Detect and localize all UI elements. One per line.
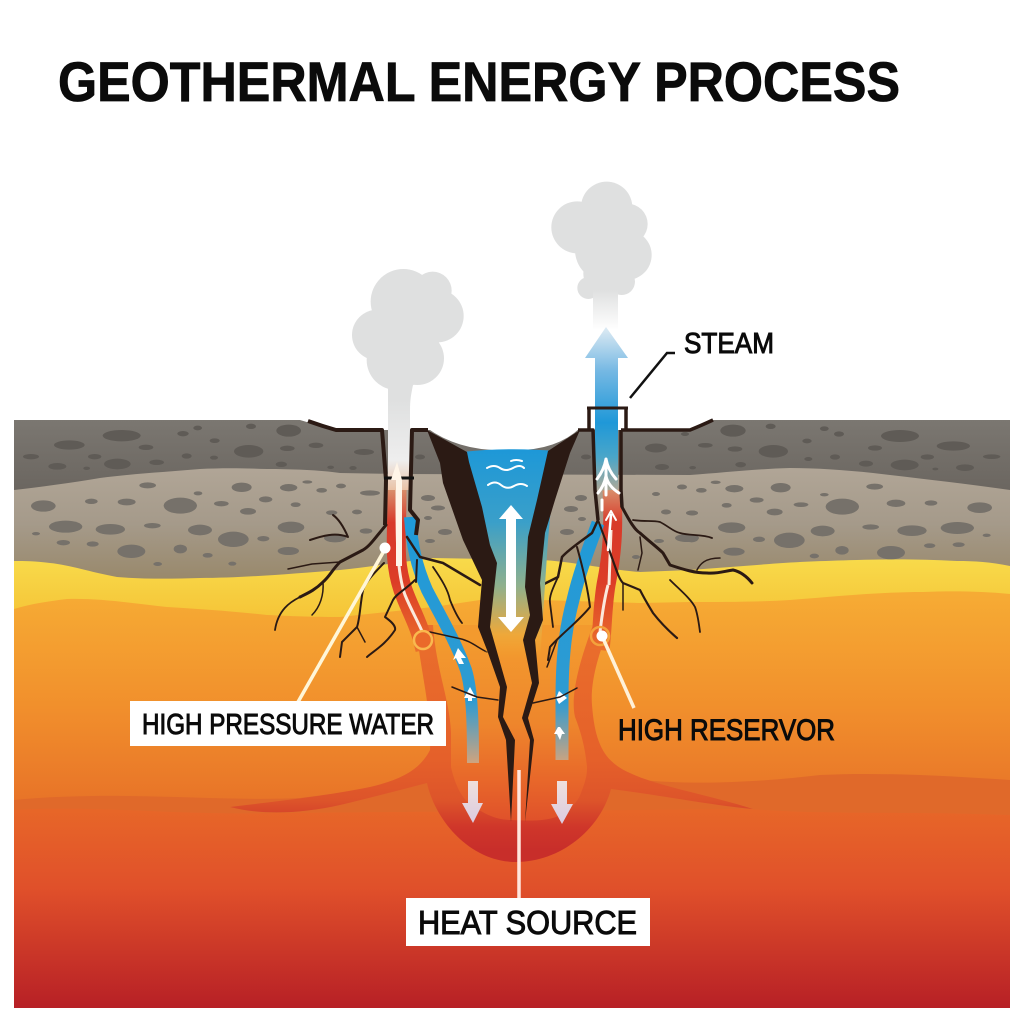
cracks: left fissures — [275, 515, 498, 700]
basin: white cut-out — [413, 428, 580, 450]
steam plume: left cloud — [352, 269, 464, 390]
arrow: right downward flow — [551, 781, 573, 824]
label: steam: STEAM — [684, 328, 774, 360]
arrow: water double-headed — [498, 505, 524, 632]
pipe: left hot well — [396, 490, 425, 650]
layer: deep red zone — [14, 809, 1010, 1008]
label: high pressure water: HIGH PRESSURE WATER — [142, 709, 434, 741]
heat plume with wings — [230, 625, 753, 862]
water ripples — [487, 460, 527, 488]
layer: darker mid stripe — [14, 774, 1010, 816]
white flow lines in pipes — [397, 480, 611, 636]
steam plume: right cloud — [551, 182, 652, 299]
pipe: right hot well — [600, 490, 613, 650]
pipe: right cold water — [562, 523, 598, 760]
well: right casing and ground line — [578, 408, 713, 520]
leader: high reservoir — [596, 630, 634, 708]
leader: steam — [630, 353, 675, 398]
rocks: left tan layer — [31, 480, 380, 566]
water reservoir — [462, 449, 556, 660]
small white arrows in water pipes — [453, 648, 567, 740]
arrow: left downward flow — [462, 781, 483, 823]
title: GEOTHERMAL ENERGY PROCESS — [58, 50, 900, 113]
label: high pressure water — [130, 701, 446, 746]
rocks: right dark layer — [689, 424, 1000, 471]
label: heat source: HEAT SOURCE — [418, 904, 637, 941]
rocks: centre tan and dark layer — [415, 432, 699, 559]
panel: earth cross-section — [14, 420, 1010, 1008]
arrow: steam rising from right well — [585, 327, 628, 490]
inner plume area — [433, 625, 593, 821]
pipe: left cold water — [410, 517, 473, 763]
steam arrows: left well — [391, 462, 402, 566]
cracks: right fissures — [533, 507, 752, 703]
steam column: left well — [388, 385, 413, 490]
leader: heat source — [517, 770, 521, 899]
label: high reservoir: HIGH RESERVOR — [618, 714, 835, 747]
fissure: left black wedge — [427, 430, 515, 822]
reservoir ring: left — [414, 631, 432, 649]
leader: high pressure water — [298, 542, 390, 702]
layer: dark grey rock — [14, 420, 1010, 490]
fissure: right black wedge — [522, 430, 580, 822]
reservoir ring: right — [591, 627, 609, 645]
steam arrows: right well — [597, 459, 619, 550]
rocks: left dark layer — [23, 424, 374, 470]
well: left casing and ground line — [308, 421, 428, 535]
rocks: right tan layer — [685, 481, 992, 559]
layer: tan rock — [14, 455, 1010, 579]
layer: yellow sediment — [14, 545, 1010, 617]
steam column: right well — [593, 288, 618, 330]
layer: orange magma base — [14, 590, 1010, 1008]
